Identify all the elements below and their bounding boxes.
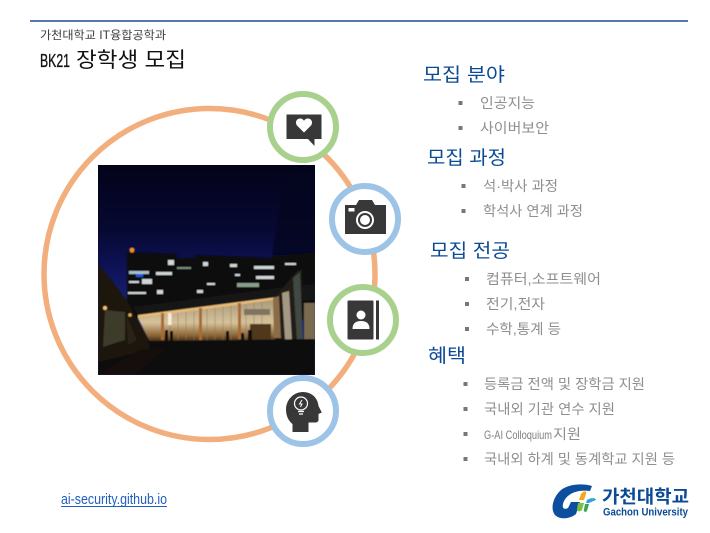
section: benefits: 혜택 <box>428 345 466 367</box>
section: recruiting programs: 학석사 연계 과정 <box>483 203 583 219</box>
section: recruiting fields: 모집 분야 <box>423 64 505 86</box>
section: recruiting majors: 모집 전공 <box>430 240 510 262</box>
section: recruiting programs: 모집 과정 <box>427 147 506 169</box>
website link: ai-security.github.io <box>61 491 167 508</box>
section: recruiting programs: 석·박사 과정 <box>483 178 558 194</box>
logo: Gachon University: Gachon University <box>603 506 689 518</box>
section: recruiting majors <box>430 240 601 337</box>
section: recruiting majors: 전기,전자 <box>486 296 545 312</box>
icon: heart speech bubble <box>270 94 336 160</box>
campus night photo <box>98 165 315 375</box>
title: BK21 <box>40 51 70 71</box>
icon: camera <box>332 186 398 252</box>
section: benefits: G-AI Colloquium <box>484 428 552 442</box>
subtitle: department: 가천대학교 IT융합공학과 <box>40 28 166 42</box>
section: recruiting programs <box>427 147 583 219</box>
section: recruiting fields <box>423 64 549 136</box>
section: recruiting majors: 수학,통계 등 <box>486 321 561 337</box>
icon: address book <box>330 287 396 353</box>
logo: Gachon University <box>553 484 689 518</box>
section: benefits: 등록금 전액 및 장학금 지원 <box>484 376 645 392</box>
icon: head with light bulb <box>270 378 336 444</box>
logo: Gachon University: 가천대학교 <box>602 487 689 507</box>
section: benefits <box>428 345 675 467</box>
title: 장학생 모집 <box>76 49 186 72</box>
section: benefits: 지원 <box>553 426 581 442</box>
section: benefits: 국내외 기관 연수 지원 <box>484 401 615 417</box>
section: benefits: 국내외 하계 및 동계학교 지원 등 <box>484 451 675 467</box>
orange ring <box>44 108 375 440</box>
section: recruiting majors: 컴퓨터,소프트웨어 <box>486 271 601 287</box>
section: recruiting fields: 인공지능 <box>480 95 535 111</box>
section: recruiting fields: 사이버보안 <box>480 120 549 136</box>
